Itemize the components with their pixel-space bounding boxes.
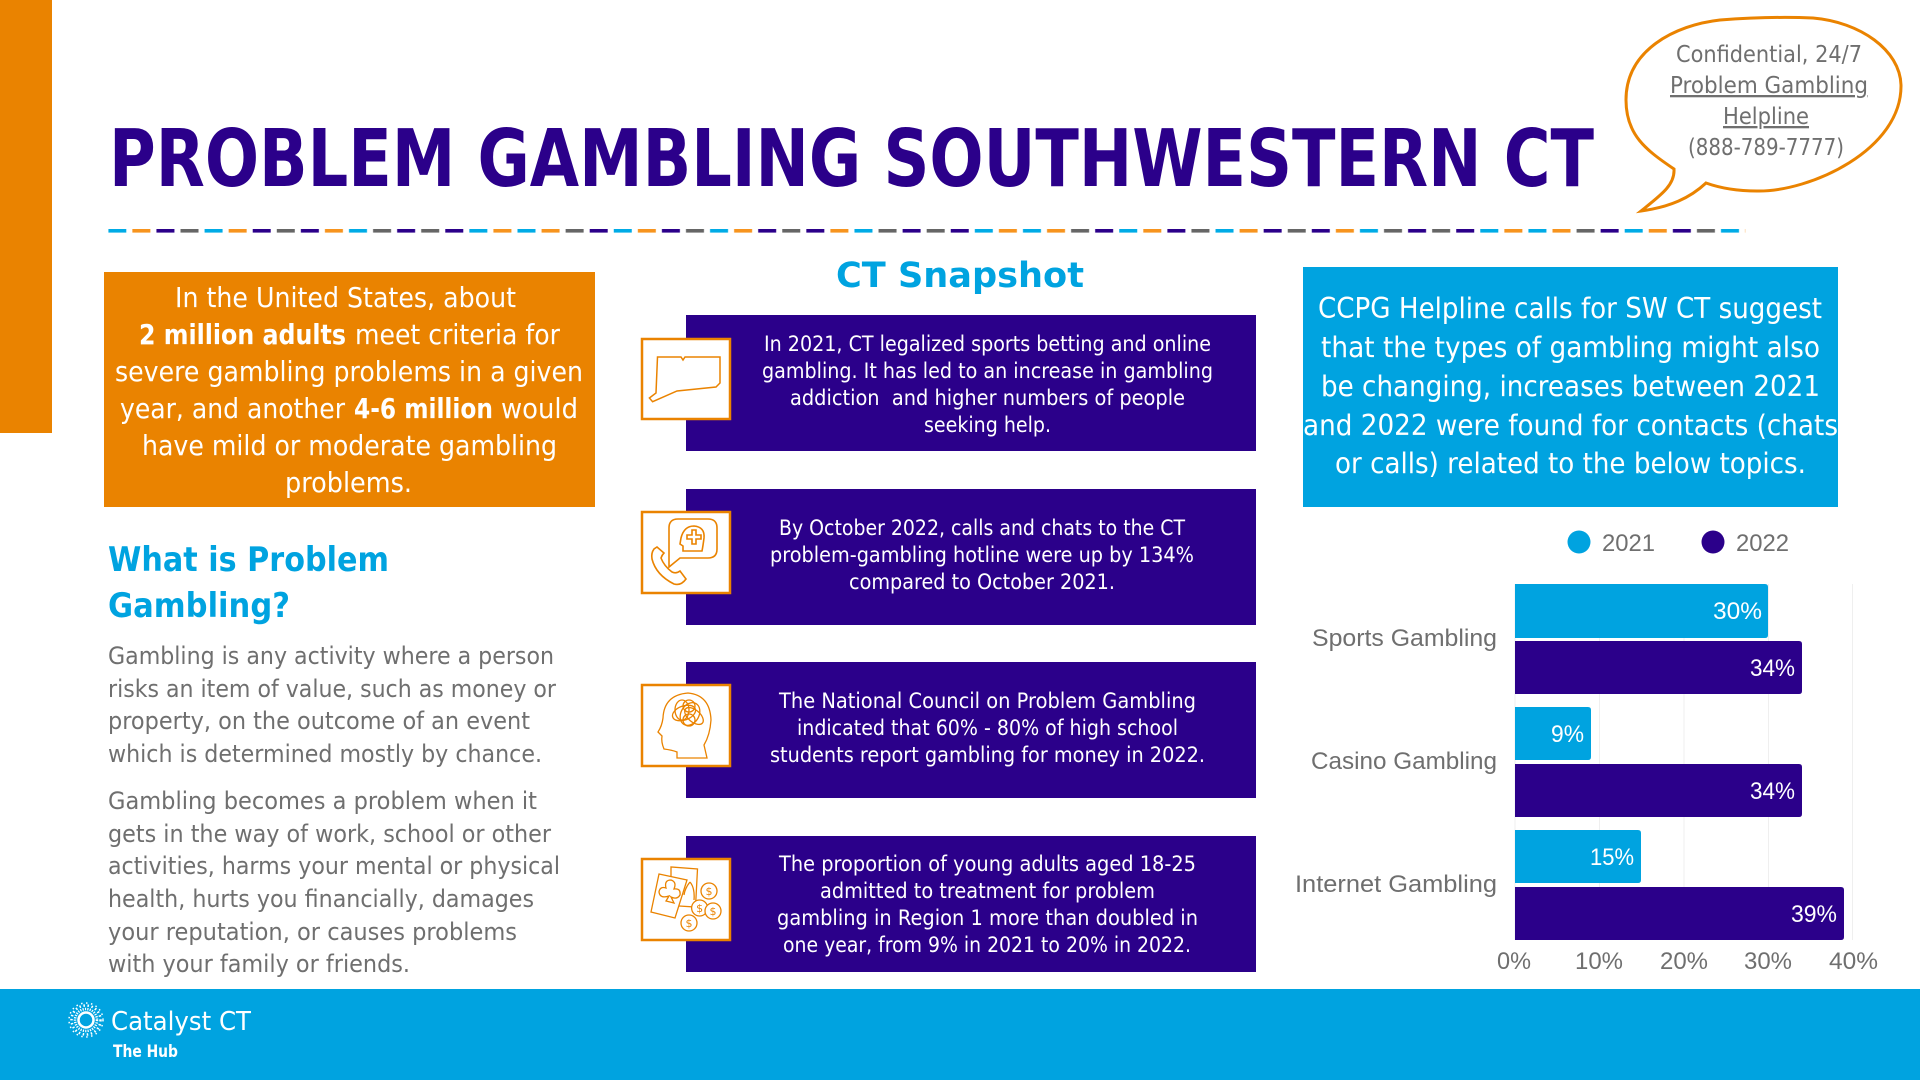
axis labels: 20% <box>1660 948 1708 975</box>
helpline text: Problem Gambling <box>1670 73 1868 99</box>
icon: playing cards and coins: $ <box>710 905 716 918</box>
category labels: Internet Gambling <box>1295 871 1497 898</box>
statistics text: meet criteria for <box>355 319 561 351</box>
speech bubble outline <box>1626 17 1901 211</box>
value labels: 15% <box>1590 844 1634 871</box>
icon: playing cards and coins: $ <box>696 902 703 915</box>
icon: Catalyst CT sunburst logo <box>69 1003 103 1037</box>
statistics text: would <box>501 393 578 425</box>
findings text: be changing, increases between 2021 <box>1321 370 1820 403</box>
statistics text: 2 million adults <box>139 319 346 351</box>
value labels: 34% <box>1750 778 1795 805</box>
statistics text <box>115 282 583 499</box>
text block: gambling definition <box>108 642 556 768</box>
axis labels: 10% <box>1575 948 1623 975</box>
axis labels: 30% <box>1744 948 1792 975</box>
snapshot text: By October 2022, calls and chats to the CT <box>779 516 1186 541</box>
axis labels: 0% <box>1497 948 1531 975</box>
icon: head with tangled thoughts <box>642 685 730 766</box>
orange accent bar <box>0 0 52 433</box>
chart legend: 2022 <box>1736 530 1789 557</box>
helpline text: Confidential, 24/7 <box>1676 42 1862 68</box>
axis labels <box>1497 948 1878 975</box>
findings text: or calls) related to the below topics. <box>1335 447 1806 480</box>
text block: gambling definition: which is determined mostly by chance. <box>108 740 542 768</box>
category labels: Sports Gambling <box>1312 625 1497 652</box>
bars 2021 <box>1515 584 1768 883</box>
helpline text <box>1670 42 1868 161</box>
text block: when gambling becomes a problem: activities, harms your mental or physical <box>108 852 560 880</box>
findings text: CCPG Helpline calls for SW CT suggest <box>1318 292 1822 325</box>
value labels: 34% <box>1750 655 1795 682</box>
heading: CT Snapshot: CT Snapshot <box>836 256 1084 296</box>
snapshot text: indicated that 60% - 80% of high school <box>797 716 1178 741</box>
callout: helpline speech bubble <box>1626 17 1901 211</box>
snapshot text: one year, from 9% in 2021 to 20% in 2022. <box>783 933 1191 958</box>
snapshot text: The proportion of young adults aged 18-25 <box>778 852 1196 877</box>
text block: when gambling becomes a problem: with your family or friends. <box>108 950 410 978</box>
helpline text: Helpline <box>1723 104 1809 130</box>
icon: Connecticut map <box>642 339 730 419</box>
heading: what is problem gambling <box>108 540 389 626</box>
category labels <box>1295 625 1497 898</box>
statistics text: In the United States, about <box>175 282 516 314</box>
bars 2022 <box>1515 641 1844 940</box>
text block: gambling definition: Gambling is any activity where a person <box>108 642 554 670</box>
text block: when gambling becomes a problem <box>108 787 560 978</box>
snapshot text <box>770 516 1194 595</box>
panel: snapshot 1 legalization <box>642 315 1256 451</box>
footer band <box>0 989 1920 1080</box>
category labels: Casino Gambling <box>1311 748 1497 775</box>
title: PROBLEM GAMBLING SOUTHWESTERN CT <box>109 113 1594 205</box>
helpline text: (888-789-7777) <box>1688 135 1844 161</box>
heading: what is problem gambling: What is Problem <box>108 540 389 580</box>
text block: when gambling becomes a problem: Gambling becomes a problem when it <box>108 787 537 815</box>
icon: playing cards and coins <box>642 859 730 940</box>
snapshot text: gambling. It has led to an increase in gambling <box>762 359 1213 384</box>
findings text: and 2022 were found for contacts (chats <box>1303 409 1838 442</box>
value labels <box>1551 598 1837 928</box>
value labels: 9% <box>1551 721 1584 748</box>
text block: gambling definition: property, on the outcome of an event <box>108 707 530 735</box>
panel: snapshot 2 hotline calls <box>642 489 1256 625</box>
statistics text: 4-6 million <box>354 393 493 425</box>
text block: gambling definition: risks an item of value, such as money or <box>108 675 556 703</box>
snapshot text <box>762 332 1213 438</box>
grid lines <box>1515 584 1852 940</box>
value labels: 39% <box>1791 901 1837 928</box>
snapshot text <box>770 689 1205 768</box>
axis labels: 40% <box>1829 948 1878 975</box>
snapshot text: admitted to treatment for problem <box>820 879 1155 904</box>
snapshot text <box>777 852 1198 958</box>
icon: phone and speech bubble with head <box>642 512 730 593</box>
statistics text: severe gambling problems in a given <box>115 356 583 388</box>
statistics text: have mild or moderate gambling <box>142 430 557 462</box>
panel: helpline call findings <box>1303 267 1838 507</box>
panel: national statistics <box>104 272 595 507</box>
findings text <box>1303 292 1838 480</box>
statistics text: problems. <box>285 467 412 499</box>
snapshot text: The National Council on Problem Gambling <box>778 689 1196 714</box>
snapshot text: gambling in Region 1 more than doubled in <box>777 906 1198 931</box>
findings text: that the types of gambling might also <box>1321 331 1820 364</box>
snapshot text: addiction and higher numbers of people <box>790 386 1185 411</box>
snapshot text: compared to October 2021. <box>849 570 1115 595</box>
text block: when gambling becomes a problem: your reputation, or causes problems <box>108 918 517 946</box>
snapshot text: seeking help. <box>924 413 1051 438</box>
text block: when gambling becomes a problem: gets in the way of work, school or other <box>108 820 551 848</box>
statistics text: year, and another <box>120 393 346 425</box>
value labels: 30% <box>1713 598 1762 625</box>
snapshot text: students report gambling for money in 2022. <box>770 743 1205 768</box>
text block: when gambling becomes a problem: health, hurts you financially, damages <box>108 885 534 913</box>
icon: playing cards and coins: $ <box>686 917 692 930</box>
chart legend: 2021 <box>1602 530 1655 557</box>
bar chart: contacts by gambling type <box>1295 530 1878 975</box>
logo text: Catalyst CT <box>111 1007 251 1037</box>
icon: playing cards and coins: $ <box>706 885 712 898</box>
logo subtitle: The Hub <box>113 1042 178 1062</box>
panel: snapshot 3 high school students <box>642 662 1256 798</box>
chart legend <box>1568 530 1789 557</box>
panel: snapshot 4 young adults <box>642 836 1256 972</box>
snapshot text: In 2021, CT legalized sports betting and online <box>764 332 1211 357</box>
snapshot text: problem-gambling hotline were up by 134% <box>770 543 1194 568</box>
heading: what is problem gambling: Gambling? <box>108 586 290 626</box>
